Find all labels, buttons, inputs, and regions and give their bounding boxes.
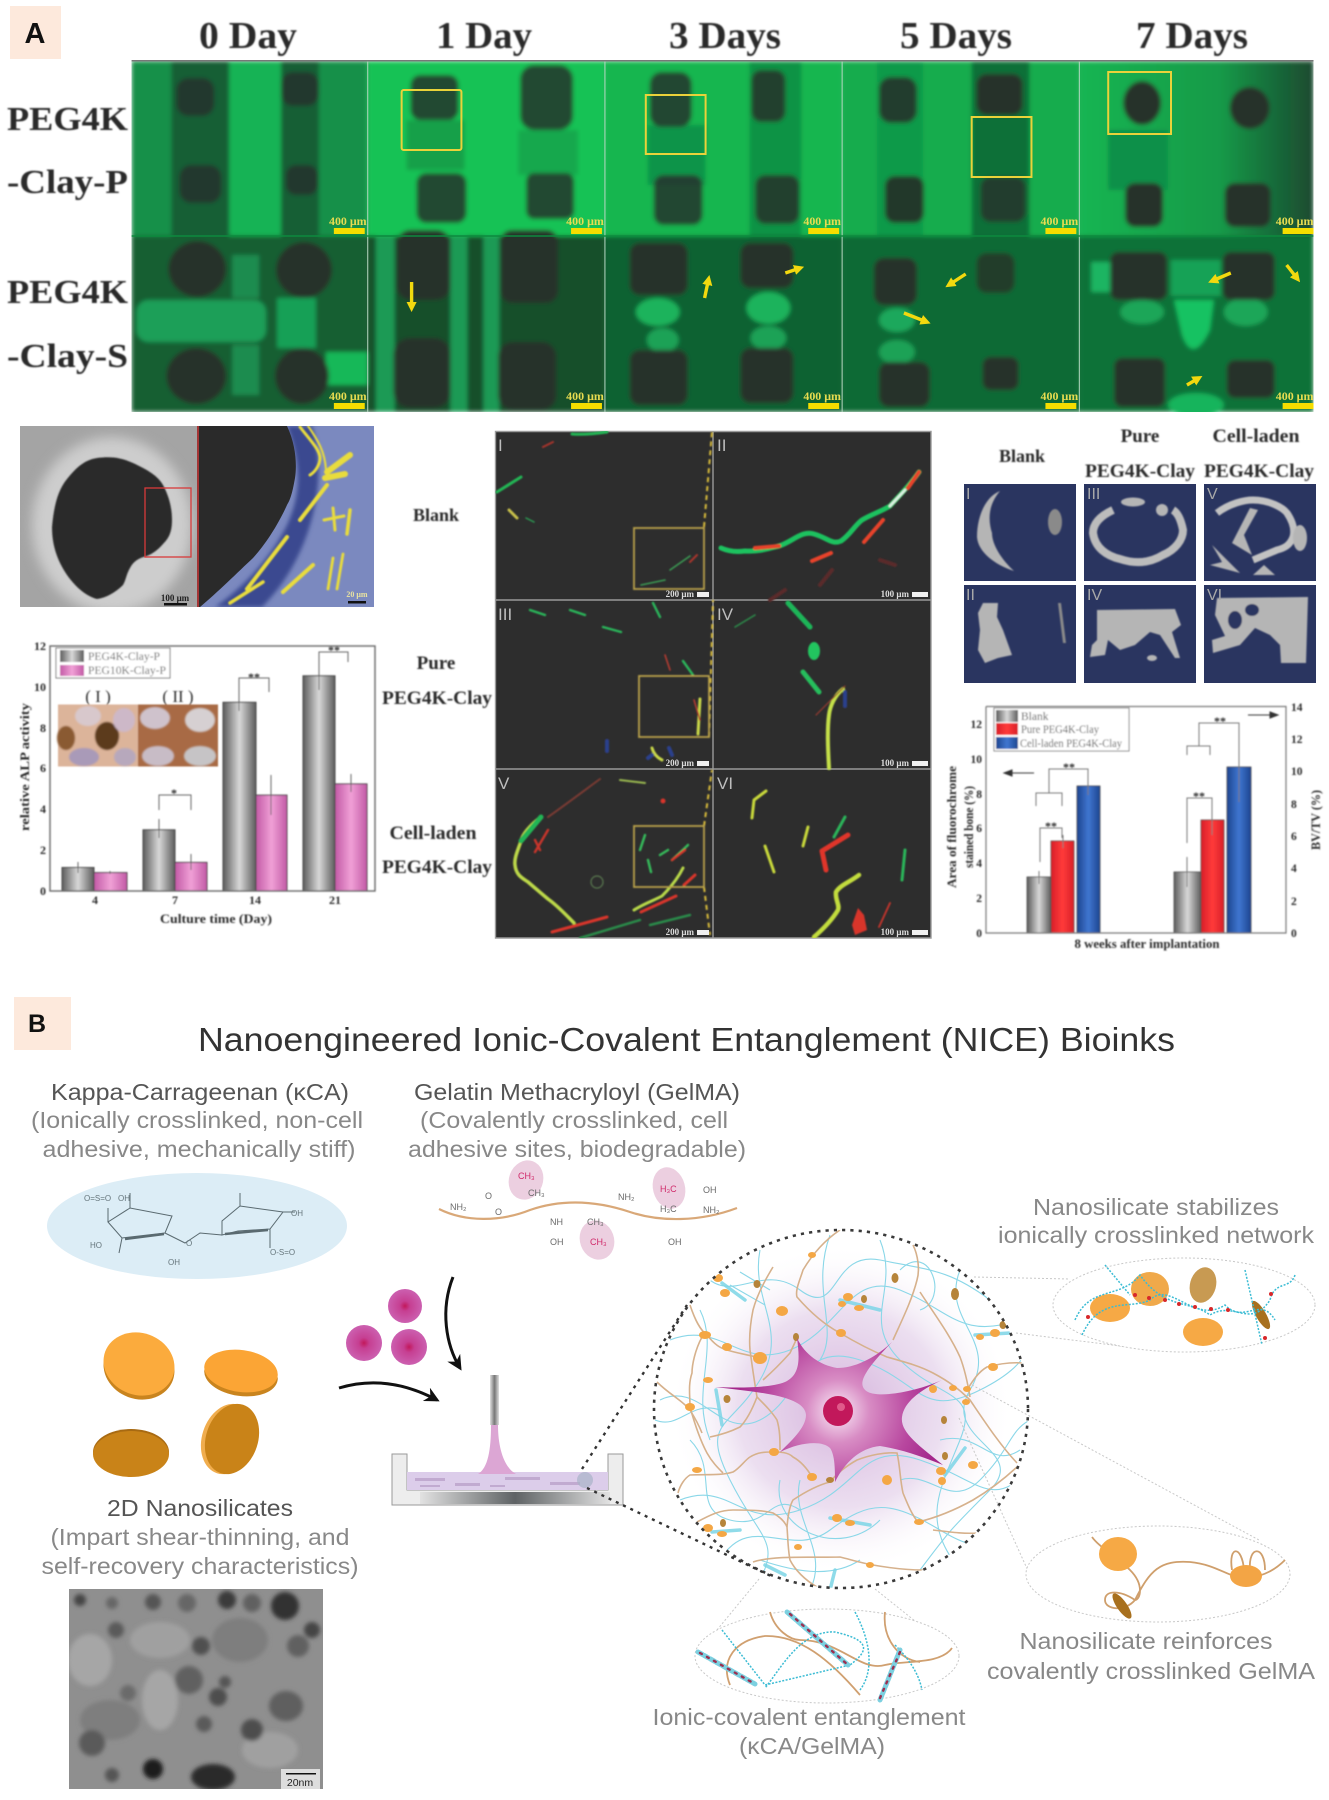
GelMA chain structure: O [495,1207,502,1217]
panel V fibres [515,779,695,938]
dashed circle outline [654,1230,1028,1588]
text: Gelatin Methacryloyl [408,1079,746,1162]
SEM micrograph pair [20,426,374,613]
yellow selection boxes [402,72,1171,177]
bioprinting tray and needle [392,1375,623,1505]
400 micrometre scale bars: 400 μm [1276,214,1313,228]
left axis values: 10 [970,754,982,766]
right axis values: 6 [1291,831,1297,843]
GelMA chain structure: OH [550,1237,564,1247]
bar chart: relative ALP activity: * [171,786,177,800]
text: ionic-covalent entanglement [652,1704,966,1759]
bar chart: fluorochrome stained bone and BV/TV: ** [1214,714,1226,728]
group labels above micro-CT panels: PEG4K-Clay [1204,461,1315,482]
ALP y-axis values: 2 [40,843,46,857]
GelMA chain structure: H₃C [660,1184,677,1194]
left axis values [970,719,982,940]
ALP x-axis values: 14 [249,893,261,907]
main title of panel B: Nanoengineered Ionic-Covalent Entanglement (NICE) Bioinks [198,1021,1175,1058]
text: 2D Nanosilicates: self-recovery characteristics) [42,1553,359,1579]
text: nanosilicate reinforces: Nanosilicate reinforces [1020,1628,1272,1654]
grey SEM pore: 100 μm [161,593,190,603]
roman numeral panel tags: V [498,774,510,793]
GelMA chain structure: CH₃ [528,1188,545,1198]
GelMA chain structure: CH₃ [518,1171,535,1181]
chart legend: Pure PEG4K-Clay [1021,724,1099,736]
pores row 2 [168,241,226,297]
right axis values: 14 [1291,702,1303,714]
yellow crop boxes [634,528,709,887]
panel II fibres [721,472,919,600]
CT panel numerals [966,486,1222,604]
CT panel VI [1212,597,1308,663]
confocal scale bars: 100 μm [881,758,909,768]
ALP y-axis values: 4 [40,802,46,816]
detail ellipse: GelMA reinforced by nanosilicate [1026,1526,1290,1622]
400 micrometre scale bars [329,214,1314,409]
text: ionic-covalent entanglement: (κCA/GelMA) [739,1733,885,1759]
grey SEM pore [20,426,197,613]
ALP y-axis values: 8 [40,721,46,735]
ALP x-axis values: 7 [172,893,178,907]
text: nanosilicate reinforces [987,1628,1316,1684]
ALP x-axis values: 21 [329,893,341,907]
400 micrometre scale bars: 400 μm [566,389,604,403]
panel label A [10,6,61,59]
ALP bars [62,676,367,891]
group labels beside confocal panels: Cell-laden [390,823,477,844]
direction arrows [1004,712,1278,776]
kappa-carrageenan structure on blue ellipse: HO [90,1241,102,1250]
roman numeral panel tags: IV [717,605,734,624]
column headers: culture days: 5 Days [900,15,1012,57]
kappa-carrageenan structure on blue ellipse: O-S=O [270,1248,295,1257]
confocal scale bars: 200 μm [666,589,694,599]
400 micrometre scale bars: 400 μm [803,389,841,403]
bar chart: relative ALP activity: ** [328,643,340,657]
text: 2D Nanosilicates [42,1495,359,1579]
CT panel V [1217,500,1294,560]
confocal scale bars: 200 μm [666,927,694,937]
ALP axis titles [17,702,272,926]
ALP axes box [50,646,375,891]
CT panel IV [1090,609,1181,658]
column headers: culture days: 1 Day [436,15,532,57]
axis titles: Area of fluorochrome [944,766,959,888]
ALP y-axis values [34,639,46,898]
confocal scale bars: 100 μm [881,927,909,937]
row labels: PEG4K-Clay-P and PEG4K-Clay-S: PEG4K [7,274,129,311]
group labels beside confocal panels: PEG4K-Clay [382,857,493,878]
group labels above micro-CT panels: Blank [999,446,1045,466]
group labels above micro-CT panels: Cell-laden [1212,426,1300,447]
row labels: PEG4K-Clay-P and PEG4K-Clay-S: PEG4K [7,101,129,138]
group labels beside confocal panels [382,505,493,878]
column headers: culture days: 3 Days [669,15,781,57]
stained scaffold photo inset: ( II ) [162,687,194,706]
column headers: culture days [199,15,1248,57]
GelMA chain structure: NH₂ [703,1205,720,1215]
CT panel numerals: III [1087,486,1100,503]
false-colour SEM zoom [197,426,374,607]
group labels above micro-CT panels [999,426,1315,482]
bar chart: fluorochrome stained bone and BV/TV: ** [1045,819,1057,833]
arrow: nanosilicates and cells into bioprinter [339,1383,437,1400]
text: nanosilicate stabilizes: ionically crosslinked network [998,1222,1315,1248]
chart legend [994,708,1129,751]
confocal fluorescence panels I-VI [495,431,931,938]
roman numeral panel tags: I [498,436,503,455]
column headers: culture days: 0 Day [199,15,297,57]
dashed magnification lines to hydrogel circle [582,1305,773,1577]
stained bone bars [1027,767,1251,933]
stained scaffold photo inset: ( I ) [85,687,111,706]
axis titles: stained bone (%) [961,786,976,868]
left axis values: 6 [976,823,982,835]
text: nanosilicate stabilizes [998,1194,1315,1248]
bar chart: fluorochrome stained bone and BV/TV: ** [1193,789,1205,803]
yellow arrows [412,265,1298,385]
ALP y-axis values: 0 [40,884,46,898]
axis titles: BV/TV (%) [1308,790,1323,850]
GelMA chain structure: OH [668,1237,682,1247]
right axis values: 12 [1291,734,1303,746]
kappa-carrageenan structure on blue ellipse: OH [118,1194,130,1203]
fluorescence micrograph grid [132,60,1314,417]
nanosilicate particles [685,1252,1000,1568]
CT panel numerals: VI [1207,587,1222,604]
group labels beside confocal panels: Blank [413,505,459,525]
TEM micrograph of nanosilicates [68,1589,323,1790]
text: nanosilicate reinforces: covalently crosslinked GelMA [987,1658,1316,1684]
text: Kappa-Carrageenan: adhesive, mechanically stiff) [42,1136,356,1162]
ALP axis titles: Culture time (Day) [160,911,272,926]
text: 2D Nanosilicates: 2D Nanosilicates [107,1495,293,1521]
roman numeral panel tags: II [717,436,726,455]
400 micrometre scale bars: 400 μm [329,389,367,403]
chart legend: Blank [1021,711,1049,723]
text: ionic-covalent entanglement: Ionic-covalent entanglement [652,1704,966,1730]
GelMA chain structure: NH [550,1217,563,1227]
text: Gelatin Methacryloyl: adhesive sites, biodegradable) [408,1136,746,1162]
ALP x-axis values: 4 [92,893,98,907]
left axis values: 8 [976,789,982,801]
chart legend: Cell-laden PEG4K-Clay [1020,738,1122,750]
axis titles [944,766,1323,951]
axis titles: 8 weeks after implantation [1074,936,1220,951]
yellow dashed zoom guides [704,432,713,935]
right axis values: 4 [1291,863,1297,875]
confocal scale bars [666,589,928,937]
panel IV fibres [735,603,845,768]
panel VI fibres [752,791,905,937]
400 micrometre scale bars: 400 μm [1276,389,1313,403]
ALP y-axis values: 10 [34,680,46,694]
text: Kappa-Carrageenan: (Ionically crosslinked, non-cell [31,1107,363,1133]
row 1 backgrounds [132,61,368,236]
cyan crosslink clusters [712,1283,1010,1590]
400 micrometre scale bars: 400 μm [1041,389,1078,403]
CT panel numerals: V [1207,486,1218,503]
GelMA chain structure: O [485,1191,492,1201]
icon: four nanosilicate discs [93,1323,281,1481]
left axis values: 2 [976,893,982,905]
text: 2D Nanosilicates: (Impart shear-thinning, and [50,1524,350,1550]
GelMA chain structure [439,1155,737,1265]
GelMA chain structure: CH₃ [587,1217,604,1227]
ALP error bars and significance brackets [78,652,351,874]
row labels: PEG4K-Clay-P and PEG4K-Clay-S [7,101,129,375]
ALP legend: PEG4K-Clay-P [88,651,160,663]
arrow: GelMA and kCA into bioprinter [446,1277,460,1368]
left axis values: 0 [976,928,982,940]
right axis values: 8 [1291,799,1297,811]
bar chart: relative ALP activity [17,639,375,926]
error bars and significance brackets [1036,723,1239,887]
chart axes [986,706,1286,933]
GelMA chain structure: CH₃ [590,1237,607,1247]
row 2 backgrounds [132,236,368,412]
grey connectors to detail ellipses [698,1277,1259,1653]
kappa-carrageenan structure on blue ellipse: O [186,1239,192,1248]
ALP x-axis values [92,893,341,907]
kappa-carrageenan structure on blue ellipse [47,1173,347,1279]
kappa-carrageenan structure on blue ellipse: OH [168,1258,180,1267]
ALP legend [56,648,170,678]
left axis values: 12 [970,719,982,731]
CT panel numerals: II [966,587,975,604]
polymer fibres [655,1230,1040,1590]
CT panel I [977,491,1014,571]
network circle with encapsulated cell [654,1230,1040,1590]
bar chart: fluorochrome stained bone and BV/TV [944,702,1323,951]
group labels above micro-CT panels: Pure [1121,426,1159,447]
right axis values: 0 [1291,928,1297,940]
purple glow [669,1244,1013,1574]
confocal scale bars: 200 μm [666,758,694,768]
400 micrometre scale bars: 400 μm [329,214,367,228]
tile divider lines [368,61,1079,412]
kappa-carrageenan structure on blue ellipse: OH [291,1209,303,1218]
400 micrometre scale bars: 400 μm [803,214,841,228]
text: Kappa-Carrageenan: Kappa-Carrageenan (κCA) [51,1079,349,1105]
pores row 1 [176,78,214,116]
bar chart: relative ALP activity: ** [248,670,260,684]
false-colour SEM zoom: 20 μm [346,590,368,599]
text: Kappa-Carrageenan [31,1079,363,1162]
detail ellipse: ionic network with nanosilicates [1053,1258,1315,1352]
400 micrometre scale bars: 400 μm [1041,214,1078,228]
roman numeral panel tags: III [498,605,512,624]
right axis values [1291,702,1303,940]
detail ellipse: ionic-covalent entanglement [695,1609,959,1703]
star-shaped cell [715,1338,943,1482]
row labels: PEG4K-Clay-P and PEG4K-Clay-S: -Clay-P [7,164,128,201]
row labels: PEG4K-Clay-P and PEG4K-Clay-S: -Clay-S [7,338,128,375]
CT panel II [978,603,1012,663]
kappa-carrageenan structure on blue ellipse: O=S=O [84,1194,111,1203]
panel label B [14,997,71,1050]
400 micrometre scale bars: 400 μm [566,214,604,228]
column headers: culture days: 7 Days [1136,15,1248,57]
bar chart: fluorochrome stained bone and BV/TV: ** [1063,760,1075,774]
panel label B: B [28,1010,46,1038]
ALP y-axis values: 6 [40,761,46,775]
panel I fibres [497,432,697,585]
group labels above micro-CT panels: PEG4K-Clay [1085,461,1196,482]
text: Gelatin Methacryloyl: (Covalently crosslinked, cell [420,1107,728,1133]
GelMA chain structure: H₃C [660,1204,677,1214]
left axis values: 4 [976,858,982,870]
TEM micrograph of nanosilicates: 20nm [287,1777,313,1789]
right axis values: 2 [1291,896,1297,908]
icon: three cells [346,1289,427,1365]
group labels beside confocal panels: PEG4K-Clay [382,688,493,709]
CT panel numerals: I [966,486,970,503]
GelMA chain structure: NH₂ [450,1202,467,1212]
text: nanosilicate stabilizes: Nanosilicate stabilizes [1033,1194,1279,1220]
micro-CT bone reconstruction panels [964,484,1316,683]
roman numeral panel tags [498,436,734,793]
ALP legend: PEG10K-Clay-P [88,665,166,677]
roman numeral panel tags: VI [717,774,733,793]
CT panel III [1093,510,1183,562]
text: Gelatin Methacryloyl: Gelatin Methacryloyl (GelMA) [414,1079,740,1105]
stained scaffold photo inset [57,687,218,766]
ALP axis titles: relative ALP activity [17,702,32,831]
ALP y-axis values: 12 [34,639,46,653]
CT panel numerals: IV [1087,587,1102,604]
group labels beside confocal panels: Pure [417,653,455,674]
right axis values: 10 [1291,766,1303,778]
panel III fibres [530,603,700,760]
GelMA chain structure: NH₂ [618,1192,635,1202]
confocal scale bars: 100 μm [881,589,909,599]
GelMA chain structure: OH [703,1185,716,1195]
panel label A: A [25,18,46,50]
